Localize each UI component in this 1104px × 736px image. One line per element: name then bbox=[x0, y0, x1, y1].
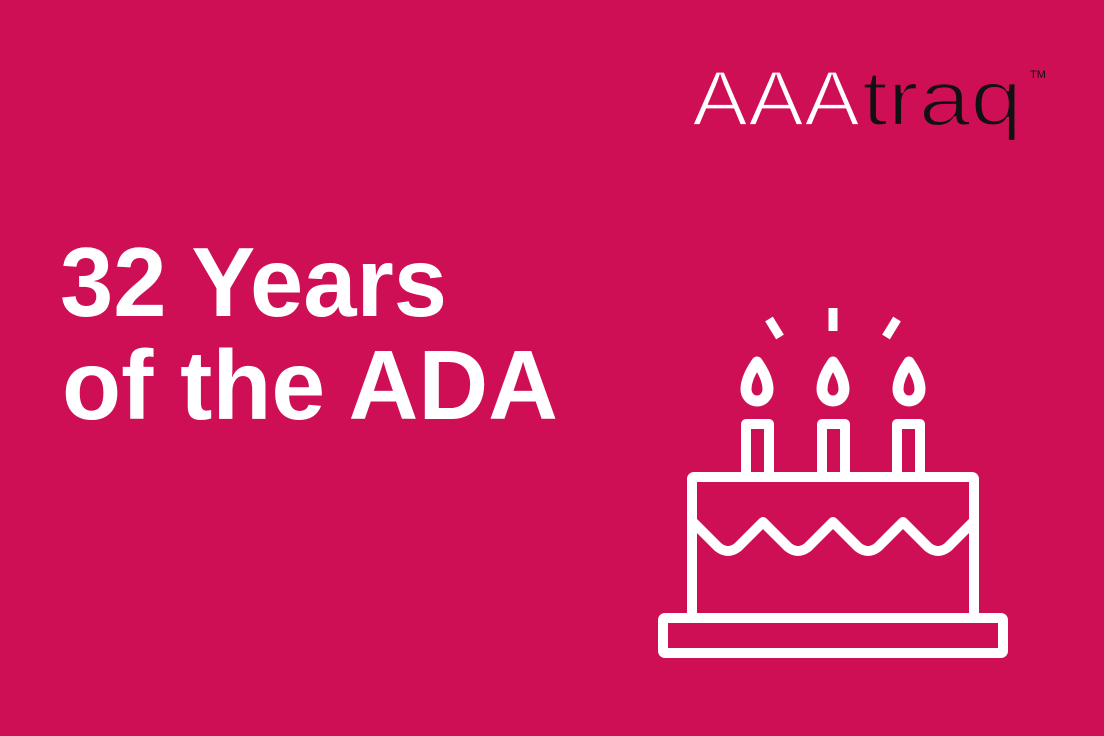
cake body bbox=[692, 477, 974, 618]
sparks bbox=[769, 308, 897, 337]
flames bbox=[746, 362, 920, 401]
cake base bbox=[663, 618, 1003, 653]
title bbox=[60, 227, 558, 440]
candles bbox=[746, 424, 920, 472]
title: 32 Years bbox=[60, 227, 447, 337]
logo: AAAtraq: TM bbox=[1030, 69, 1046, 81]
icon: birthday cake bbox=[663, 308, 1003, 653]
title: of the ADA bbox=[62, 330, 558, 440]
logo: AAAtraq: traq bbox=[862, 54, 1022, 142]
logo: AAAtraq bbox=[692, 54, 1046, 142]
logo: AAAtraq: AAA bbox=[692, 54, 860, 142]
icing wave bbox=[692, 521, 974, 551]
